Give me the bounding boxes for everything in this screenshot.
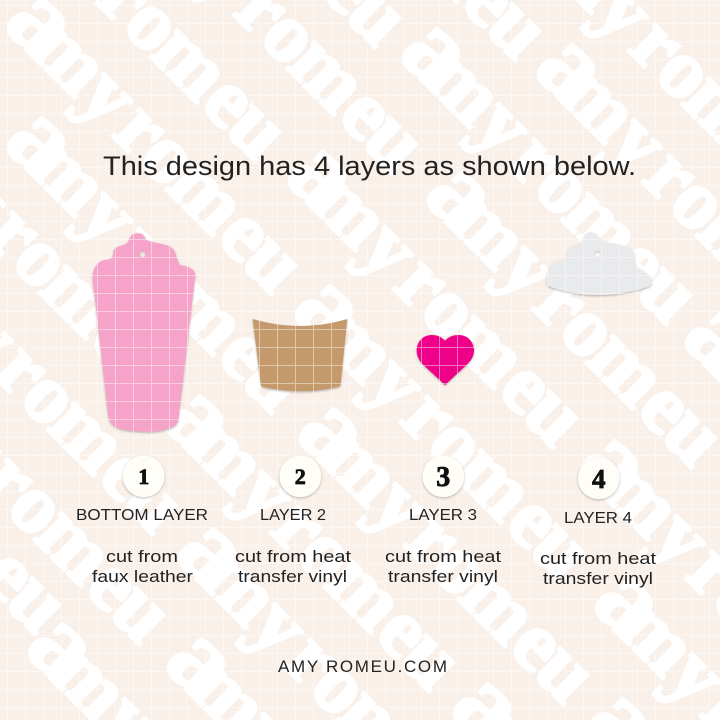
number badge 4: 4 <box>592 464 605 494</box>
column 3: layer 3 <box>385 456 501 586</box>
description: heat transfer vinyl: transfer vinyl <box>388 567 498 586</box>
description: heat transfer vinyl <box>385 547 501 586</box>
description: heat transfer vinyl: transfer vinyl <box>238 567 347 586</box>
watermark pattern: amy romeu: amy romeu <box>143 356 497 710</box>
shape: layer 2 cup sleeve <box>253 319 347 391</box>
column 4: layer 4 <box>540 458 656 588</box>
shape: bottom layer cup <box>93 233 195 432</box>
shape: layer 4 whipped cream <box>547 232 652 295</box>
description: heat transfer vinyl: cut from heat <box>540 549 656 568</box>
label: bottom layer: BOTTOM LAYER <box>76 507 208 524</box>
label: layer 2: LAYER 2 <box>260 507 326 524</box>
description: faux leather <box>92 547 193 586</box>
label: layer 4: LAYER 4 <box>564 510 632 527</box>
footer website: AMY ROMEU.COM <box>278 657 447 676</box>
description: heat transfer vinyl: cut from heat <box>235 547 351 566</box>
number badge 1: 1 <box>138 464 149 489</box>
description: heat transfer vinyl <box>235 547 351 586</box>
label: layer 3: LAYER 3 <box>409 507 477 524</box>
heading: This design has 4 layers as shown below. <box>103 151 636 181</box>
column 2: layer 2 <box>235 456 351 586</box>
number badge 2: 2 <box>295 464 306 489</box>
watermark pattern: amy romeu: amy romeu <box>277 369 631 720</box>
description: heat transfer vinyl: cut from heat <box>385 547 501 566</box>
watermark pattern: amy romeu: amy romeu <box>273 246 627 600</box>
watermark pattern: amy romeu: amy romeu <box>266 112 620 466</box>
shape: layer 3 heart <box>417 335 474 385</box>
number badge 3: 3 <box>436 462 450 493</box>
column 1: bottom layer <box>76 456 208 586</box>
description: heat transfer vinyl: transfer vinyl <box>543 569 653 588</box>
description: heat transfer vinyl <box>540 549 656 588</box>
description: faux leather: cut from <box>106 547 178 566</box>
description: faux leather: faux leather <box>92 567 193 586</box>
